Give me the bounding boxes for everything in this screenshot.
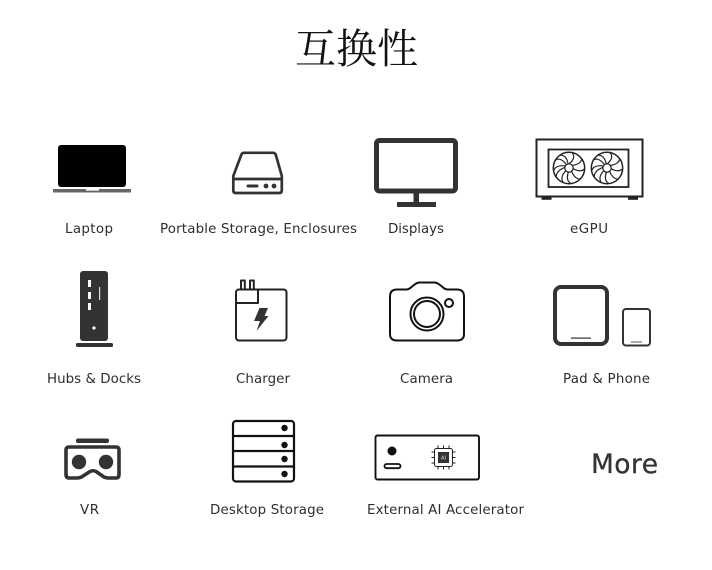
item: hubs and docks	[47, 271, 141, 387]
label: hubs and docks: Hubs & Docks	[47, 372, 141, 387]
label: VR: VR	[80, 503, 99, 518]
label: pad and phone: Pad & Phone	[563, 372, 650, 387]
icon: fan right	[591, 152, 623, 184]
title: 互换性	[295, 26, 418, 72]
icon: AI chip: AI	[441, 456, 447, 462]
icon: dock	[76, 271, 113, 347]
label: portable storage: Portable Storage, Enclosures	[160, 222, 357, 237]
label: laptop: Laptop	[65, 222, 113, 237]
icon: pad	[555, 287, 607, 344]
item: laptop	[53, 145, 131, 237]
item: VR	[66, 438, 119, 518]
label: displays: Displays	[388, 222, 444, 237]
item: pad and phone	[555, 287, 650, 387]
icon: VR headset	[66, 438, 119, 478]
item: portable storage	[160, 153, 357, 237]
item: eGPU	[536, 140, 642, 237]
icon: camera	[390, 282, 464, 340]
icon: AI accelerator box	[376, 436, 479, 480]
label: eGPU: eGPU	[570, 222, 608, 237]
item: displays	[376, 140, 456, 237]
icon: display	[376, 140, 456, 207]
item: external AI accelerator	[367, 436, 524, 518]
icon: server rack	[233, 421, 294, 482]
icon: charger	[236, 280, 286, 340]
icon: eGPU enclosure	[536, 140, 642, 200]
item: charger	[236, 280, 290, 387]
item: camera	[390, 282, 464, 387]
label: charger: Charger	[236, 372, 290, 387]
label: external AI accelerator: External AI Accelerator	[367, 503, 524, 518]
icon: phone	[623, 309, 650, 346]
icon: portable storage	[233, 153, 282, 193]
icon: laptop	[53, 145, 131, 192]
label: desktop storage: Desktop Storage	[210, 503, 324, 518]
label: more: More	[591, 449, 658, 480]
item: desktop storage	[210, 421, 324, 518]
icon: fan left	[553, 152, 585, 184]
label: camera: Camera	[400, 372, 453, 387]
